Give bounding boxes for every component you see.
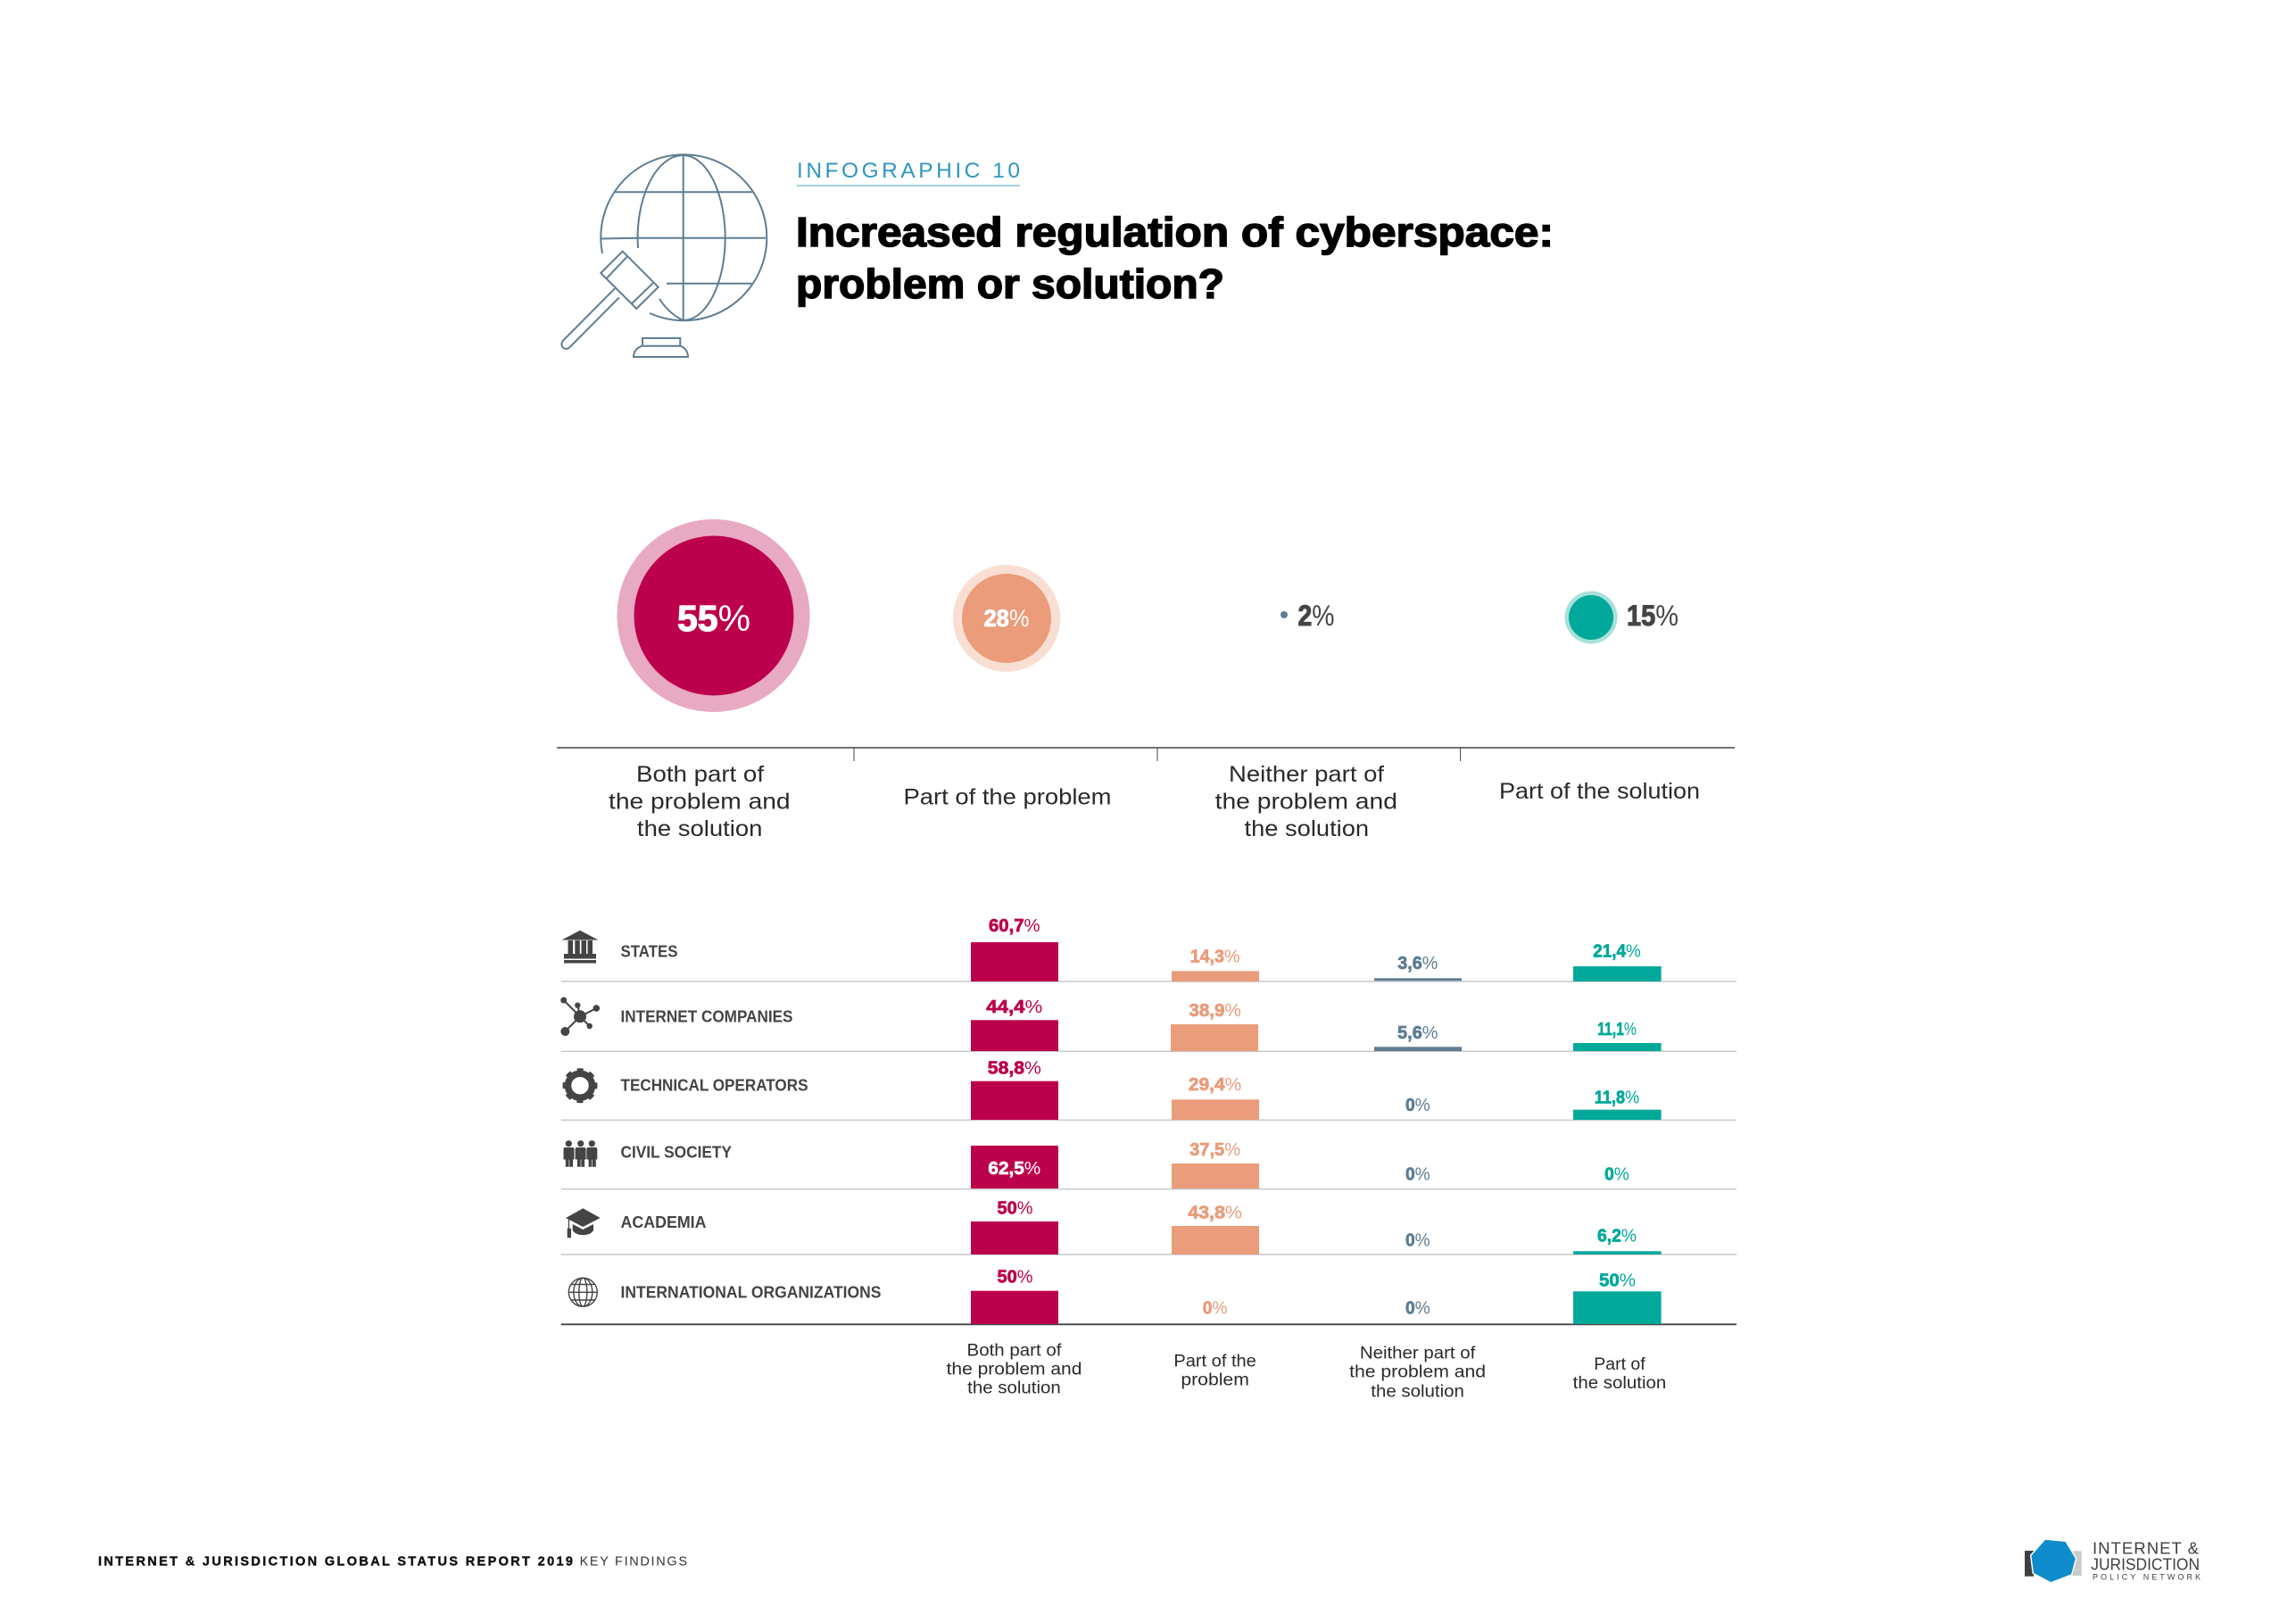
logo: Internet & Jurisdiction Policy Network: INTERNET & (2093, 1539, 2200, 1558)
values: neither: 0% (1405, 1230, 1430, 1251)
summary label: neither (1215, 762, 1397, 841)
bubble: 2% neither (1281, 600, 1335, 632)
summary axis (557, 748, 1735, 761)
logo: Internet & Jurisdiction Policy Network (2025, 1539, 2201, 1583)
values: part of the solution: 11,1% (1597, 1019, 1637, 1039)
values: part of the problem: 29,4% (1189, 1074, 1241, 1095)
row label: international organizations: INTERNATIONAL ORGANIZATIONS (621, 1283, 882, 1301)
icon: globe and gavel (561, 154, 767, 357)
column label: problem: Part of the (1173, 1353, 1256, 1371)
title: Increased regulation of cyberspace: (796, 209, 1554, 255)
column label: neither: the problem and (1349, 1362, 1486, 1381)
values: both part of the problem and the solution: 50% (998, 1266, 1033, 1287)
footer text: KEY FINDINGS (580, 1555, 687, 1569)
summary label: both: the solution (637, 816, 762, 841)
values: part of the problem: 37,5% (1189, 1139, 1240, 1160)
summary label: neither: Neither part of (1229, 762, 1384, 787)
values: part of the problem: 38,9% (1189, 1000, 1241, 1021)
values: part of the solution: 50% (1599, 1271, 1636, 1291)
values: part of the problem: 0% (1203, 1298, 1227, 1319)
values: both part of the problem and the solution (986, 915, 1042, 1287)
values: part of the solution: 21,4% (1593, 940, 1641, 961)
column label: problem (1173, 1353, 1256, 1390)
bubble: 15% solution (1565, 591, 1678, 644)
values: neither: 3,6% (1397, 953, 1438, 973)
summary label: both: Both part of (636, 762, 764, 787)
summary label: both: the problem and (609, 790, 791, 815)
bubble: 28% problem (953, 565, 1060, 672)
values: part of the solution: 0% (1604, 1163, 1629, 1184)
footer text: INTERNET & JURISDICTION GLOBAL STATUS REPORT 2019 (98, 1555, 573, 1569)
column label: neither: the solution (1371, 1383, 1464, 1402)
column label: both: the problem and (947, 1360, 1082, 1379)
values: neither: 0% (1405, 1095, 1430, 1115)
row label: academia: ACADEMIA (621, 1213, 707, 1231)
column label: solution (1573, 1355, 1666, 1393)
column label: problem: problem (1181, 1371, 1249, 1390)
row label: technical operators: TECHNICAL OPERATORS (621, 1077, 808, 1095)
summary label: neither: the problem and (1215, 790, 1397, 815)
row label: internet companies: INTERNET COMPANIES (621, 1008, 792, 1026)
bubble: 55% both (618, 519, 810, 712)
icon: technical operators (565, 1071, 595, 1101)
summary label: problem: Part of the problem (903, 785, 1112, 810)
row label: civil society: CIVIL SOCIETY (621, 1143, 732, 1161)
icon: internet companies (561, 998, 599, 1035)
bubble: 2% neither: 2% (1297, 600, 1335, 632)
icon: academia (566, 1208, 601, 1238)
values: part of the solution: 11,8% (1595, 1088, 1639, 1108)
column label: both: Both part of (967, 1341, 1062, 1360)
values: neither (1397, 953, 1438, 1319)
bubble: 28% problem: 28% (983, 605, 1030, 632)
values: part of the solution: 6,2% (1597, 1226, 1637, 1246)
icon: international organizations (568, 1278, 597, 1306)
summary label: both (609, 762, 791, 841)
row label: states: STATES (621, 942, 678, 960)
values: neither: 5,6% (1397, 1023, 1438, 1043)
bars: part of the problem (1171, 971, 1259, 1255)
header kicker: INFOGRAPHIC 10 (797, 159, 1020, 183)
column label: solution: the solution (1573, 1374, 1666, 1393)
column label: neither: Neither part of (1360, 1344, 1476, 1362)
summary label: solution: Part of the solution (1499, 779, 1700, 804)
column label: both (947, 1341, 1082, 1398)
summary label: neither: the solution (1245, 816, 1369, 841)
bubble: 15% solution: 15% (1627, 600, 1678, 632)
column label: both: the solution (967, 1379, 1061, 1398)
column label: solution: Part of (1594, 1355, 1645, 1374)
values: part of the problem (1188, 946, 1242, 1319)
bubble: 55% both: 55% (677, 598, 750, 639)
column label: neither (1349, 1344, 1486, 1402)
bars: both part of the problem and the solution (971, 942, 1058, 1324)
title (796, 209, 1554, 307)
icon: civil society (564, 1140, 597, 1167)
logo: Internet & Jurisdiction Policy Network: POLICY NETWORK (2093, 1573, 2201, 1582)
values: both part of the problem and the solution: 62,5% (988, 1158, 1040, 1179)
values: both part of the problem and the solution: 60,7% (989, 915, 1040, 936)
values: neither: 0% (1405, 1163, 1430, 1184)
bars: part of the solution (1573, 966, 1662, 1324)
values: neither: 0% (1405, 1298, 1430, 1319)
values: both part of the problem and the solution: 58,8% (988, 1057, 1041, 1078)
bars: neither (1374, 978, 1462, 1051)
values: part of the problem: 43,8% (1188, 1202, 1242, 1222)
values: part of the solution (1593, 940, 1641, 1291)
icon: states (562, 931, 598, 964)
values: both part of the problem and the solution: 44,4% (986, 997, 1042, 1017)
title: problem or solution? (796, 261, 1224, 307)
logo: Internet & Jurisdiction Policy Network: JURISDICTION (2091, 1554, 2200, 1573)
values: both part of the problem and the solution: 50% (998, 1198, 1033, 1219)
table row dividers (561, 981, 1737, 1324)
values: part of the problem: 14,3% (1190, 946, 1239, 966)
